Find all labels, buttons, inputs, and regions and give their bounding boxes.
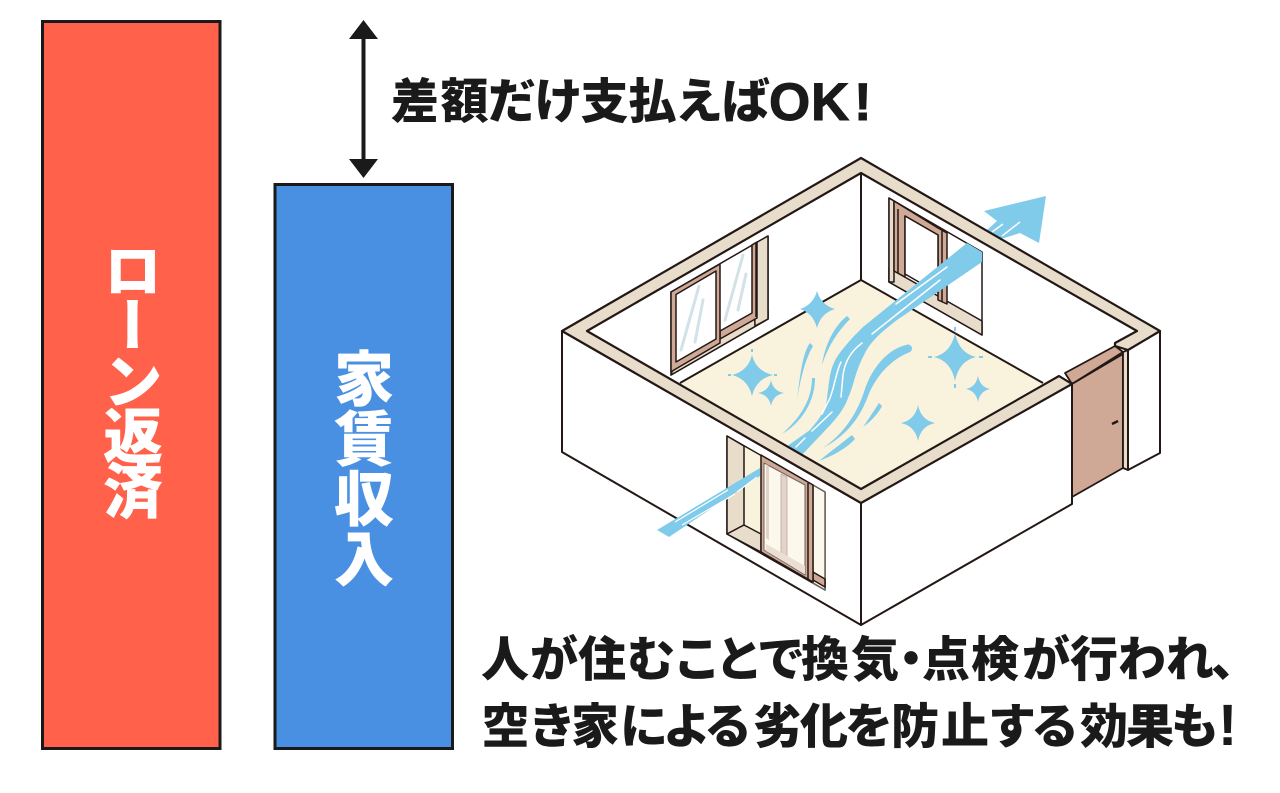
- heading: pay only the difference: OK!: [769, 73, 872, 132]
- caption: line 1: 人が住むことで換気・点検が行われ、: [481, 633, 1259, 687]
- door: [1065, 346, 1128, 497]
- exterior wall: front left: [562, 331, 861, 625]
- bar: rental income: [275, 184, 452, 748]
- window: back right wall: [889, 198, 982, 335]
- wall cap: [562, 158, 1160, 503]
- window: front sliding door: [657, 436, 825, 590]
- window: back left wall: [671, 236, 768, 375]
- arrow highlights: [992, 222, 1020, 236]
- bar: loan repayment: [42, 22, 220, 748]
- label: rental income: 家賃収入: [326, 348, 394, 588]
- wind stream highlights: [796, 267, 947, 447]
- caption: line 2: !: [1218, 693, 1237, 758]
- wind wisps: [782, 316, 912, 461]
- illustration: ventilated room: [562, 158, 1160, 625]
- room floor: [680, 280, 1043, 489]
- label: loan repayment: ローン返済: [94, 240, 162, 520]
- caption: line 2: 空き家による劣化を防止する効果も: [482, 701, 1219, 754]
- heading: pay only the difference: 差額だけ支払えば: [391, 76, 770, 129]
- wind stream: through room: [786, 243, 982, 455]
- wind stream: arrowhead: [984, 196, 1046, 243]
- arrow: difference between bars: [349, 20, 378, 178]
- exterior wall: front right: [861, 383, 1072, 625]
- back wall lines: [680, 173, 1043, 383]
- sparkles: [728, 291, 990, 441]
- exterior wall: right pillar: [1128, 331, 1160, 470]
